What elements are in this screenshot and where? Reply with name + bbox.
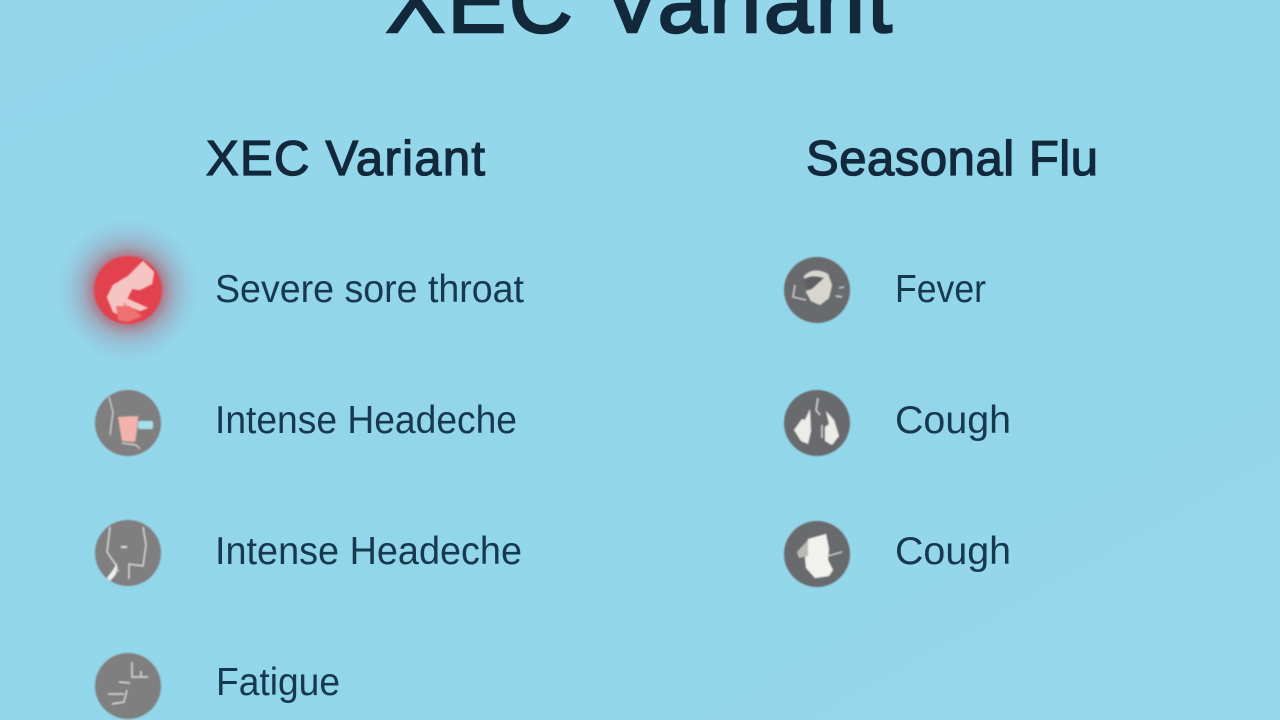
icon: fatigue <box>95 653 161 719</box>
heading: XEC Variant column: XEC Variant <box>206 132 485 186</box>
label: Intense Headeche: Intense Headeche <box>215 399 517 442</box>
label: Cough: Cough <box>895 530 1011 573</box>
icon: intense headache throat <box>95 390 161 456</box>
heading: Seasonal Flu column: Seasonal Flu <box>806 132 1098 186</box>
label: Fever: Fever <box>895 268 986 311</box>
label: Intense Headeche: Intense Headeche <box>215 530 522 573</box>
icon: intense headache head <box>95 520 161 586</box>
label: Severe sore throat: Severe sore throat <box>215 268 524 311</box>
icon: cough hands <box>784 390 850 456</box>
label: Fatigue: Fatigue <box>216 661 340 704</box>
icon: fever <box>784 257 850 323</box>
label: Cough: Cough <box>895 399 1011 442</box>
icon: severe sore throat <box>56 218 200 362</box>
icon: cough mask <box>784 521 850 587</box>
